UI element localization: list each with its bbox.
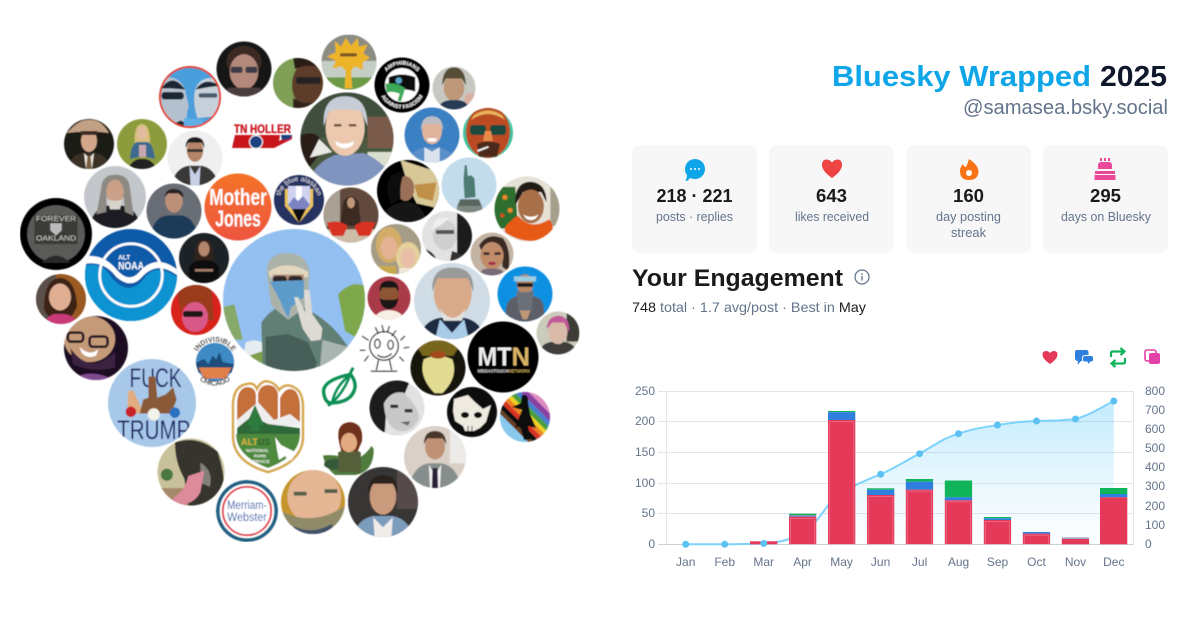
avatar: Merriam-Webster <box>216 480 278 542</box>
avatar: Alt NOAA logo <box>85 229 177 321</box>
panel: posts and replies: 218 · 221 <box>656 186 732 206</box>
right axis labels: 500 <box>1145 441 1165 455</box>
bar: May <box>828 411 855 544</box>
left axis labels: 50 <box>642 506 655 520</box>
avatar: white skull <box>447 387 497 437</box>
bar: July <box>906 479 933 544</box>
avatar: protest graphic <box>108 359 196 447</box>
avatar: MeidasTouch network: MEIDASTOUCHNETWORK <box>477 369 531 374</box>
avatar: woman with crossed arms <box>179 233 229 283</box>
avatar: Forever Oakland <box>20 198 92 270</box>
month labels <box>676 555 1124 569</box>
right axis labels: 400 <box>1145 460 1165 474</box>
month labels: Dec <box>1103 555 1124 569</box>
bar: April <box>789 514 816 544</box>
bar: September <box>984 517 1011 544</box>
panel: likes received: 643 <box>816 186 847 206</box>
right axis labels: 100 <box>1145 518 1165 532</box>
avatar: amphibians against fascism: AMPHIBIANS <box>384 60 420 72</box>
avatar: Mother Jones <box>204 174 272 240</box>
right axis labels: 700 <box>1145 403 1165 417</box>
avatar: woman with glasses <box>216 42 272 99</box>
panel: day posting streak <box>906 145 1031 253</box>
avatar: Forever Oakland: OAKLAND <box>36 233 76 242</box>
panel: posts and replies: posts · replies <box>656 210 733 224</box>
month labels: Oct <box>1027 555 1046 569</box>
avatar: blonde woman in a field <box>117 119 167 169</box>
avatar: Alt NOAA logo: ALT <box>118 254 130 261</box>
avatar: pen sketch <box>359 324 410 373</box>
avatar: smiling man with glasses <box>64 316 128 380</box>
bars <box>750 411 1127 544</box>
month labels: Aug <box>948 555 969 569</box>
chart legend <box>1042 348 1160 367</box>
bar: November <box>1062 537 1089 544</box>
icon: birthday cake <box>1094 158 1116 180</box>
icon: legend reposts <box>1111 348 1125 367</box>
avatar: dog with tongue out <box>158 438 224 506</box>
avatar: golden bearded figure <box>410 340 466 396</box>
avatar: Merriam-Webster: Webster <box>227 511 267 524</box>
avatar: Alt US National Park Service badge: ALTUS <box>241 437 270 447</box>
icon: flame <box>960 159 978 180</box>
panel: day posting streak: streak <box>951 226 987 240</box>
icon: speech bubble <box>685 159 705 181</box>
right axis labels: 600 <box>1145 422 1165 436</box>
avatar: Mother Jones: Jones <box>215 205 261 231</box>
right axis labels: 800 <box>1145 384 1165 398</box>
panel: days on Bluesky: days on Bluesky <box>1061 210 1152 224</box>
avatar: man in blue shirt <box>146 184 202 238</box>
avatar: protest graphic: TRUMP <box>117 415 190 445</box>
avatar: the onion logo <box>324 368 355 405</box>
panel: likes received: likes received <box>795 210 869 224</box>
avatar: woman close-up <box>470 232 514 276</box>
panel: likes received <box>769 145 894 253</box>
avatar: woman smiling with dark hair <box>36 274 86 324</box>
avatar: red-haired selfie <box>171 285 221 335</box>
panel: day posting streak: day posting <box>936 210 1001 224</box>
panel: days on Bluesky: 295 <box>1090 186 1121 206</box>
avatar: man in blue blazer <box>348 467 418 537</box>
month labels: Sep <box>987 555 1008 569</box>
avatar: Alt US National Park Service badge: PARK <box>254 454 267 458</box>
avatar: man on blue background <box>404 108 460 162</box>
panel: day posting streak: 160 <box>953 186 984 206</box>
avatar: painted face <box>463 106 513 158</box>
avatar: Alt US National Park Service badge: SERVICE <box>250 459 270 464</box>
icon: heart <box>822 160 842 178</box>
avatar: MeidasTouch network: MT <box>477 344 512 372</box>
avatar: bitmoji <box>323 422 374 475</box>
bar: June <box>867 488 894 544</box>
avatar: blonde woman close-up <box>281 470 345 534</box>
cumulative line <box>686 401 1114 544</box>
cumulative area <box>686 401 1114 544</box>
avatar: TN Holler logo: TN HOLLER <box>234 122 291 136</box>
avatar: Indivisible Chicago: CHICAGO <box>200 376 230 386</box>
left axis labels: 200 <box>635 414 655 428</box>
icon: legend likes <box>1042 351 1058 364</box>
title: 2025 <box>1100 61 1167 93</box>
month labels: Mar <box>753 555 774 569</box>
avatar: Alt US National Park Service badge <box>233 381 303 472</box>
avatar: woman and dog <box>377 160 439 222</box>
right axis labels <box>1145 384 1165 551</box>
avatar: sun mascot <box>322 34 376 90</box>
month labels: May <box>830 555 853 569</box>
avatar: woman in orange scarf <box>494 176 560 242</box>
avatar: man with long grey hair <box>84 166 146 228</box>
avatar: Forever Oakland: FOREVER <box>36 214 76 223</box>
left axis labels: 150 <box>635 445 655 459</box>
month labels: Jul <box>912 555 927 569</box>
bar: March <box>750 541 777 544</box>
avatar: protest graphic: FUCK <box>130 362 181 393</box>
avatar: Indivisible Chicago: INDIVISIBLE <box>193 336 237 352</box>
avatar: twin portraits <box>159 66 221 128</box>
month labels: Apr <box>793 555 812 569</box>
icon: legend replies <box>1075 350 1094 365</box>
chart: monthly engagement <box>635 384 1165 569</box>
icon: info <box>855 270 869 284</box>
month labels: Feb <box>714 555 735 569</box>
avatar: Alt US National Park Service badge: NATIONAL <box>246 448 269 453</box>
avatar: man in sunglasses on green <box>273 56 324 108</box>
avatar: man in beanie <box>432 66 476 110</box>
avatar: two blonde women <box>371 224 421 276</box>
avatar: older man in suit <box>414 263 490 339</box>
gridlines <box>658 391 1134 544</box>
avatar: statue of liberty <box>442 158 496 212</box>
avatar cloud <box>20 34 580 542</box>
handle: @samasea.bsky.social <box>963 97 1168 119</box>
right axis labels: 300 <box>1145 479 1165 493</box>
avatar: young man in hat <box>64 119 114 169</box>
bar: October <box>1023 532 1050 544</box>
right axis labels: 0 <box>1145 537 1152 551</box>
left axis labels: 250 <box>635 384 655 398</box>
avatar: Merriam-Webster: Merriam- <box>227 499 267 512</box>
avatar: man in grey suit <box>404 426 466 488</box>
title: Bluesky Wrapped <box>832 61 1091 93</box>
avatar: main profile photo <box>223 229 365 371</box>
left axis labels: 0 <box>648 537 655 551</box>
engagement summary: 748 total · 1.7 avg/post · Best in May <box>632 299 866 315</box>
month labels: Jun <box>871 555 890 569</box>
left axis labels <box>635 384 655 551</box>
right axis labels: 200 <box>1145 499 1165 513</box>
heading: your engagement: Your Engagement <box>632 265 843 292</box>
avatar: man with glasses in suit <box>168 130 222 186</box>
avatar: woman with pink hair <box>536 312 580 354</box>
avatar: tattooed man <box>498 266 552 322</box>
avatar: Indivisible Chicago <box>193 336 237 386</box>
avatar: elderly smiling man <box>300 92 394 186</box>
avatar: TN Holler logo <box>232 122 292 148</box>
bar: December <box>1100 488 1127 544</box>
panel: posts and replies <box>632 145 757 253</box>
avatar: the blue alaskan: the blue alaskan <box>276 176 322 196</box>
avatar: black and white portrait <box>422 211 472 261</box>
avatar: black and white woman <box>370 380 424 436</box>
avatar: cartoon bearded man <box>368 276 410 320</box>
avatar: amphibians against fascism <box>374 56 430 114</box>
avatar: amphibians against fascism: AGAINST FASCISM <box>380 94 424 110</box>
avatar: Alt NOAA logo: NOAA <box>118 260 144 272</box>
month labels: Nov <box>1065 555 1086 569</box>
line markers <box>682 398 1117 548</box>
bar: August <box>945 480 972 544</box>
avatar: Mother Jones: Mother <box>209 184 267 210</box>
left axis labels: 100 <box>635 476 655 490</box>
avatar: mirror selfie <box>324 188 378 242</box>
month labels: Jan <box>676 555 695 569</box>
avatar: MeidasTouch network: N <box>512 344 530 372</box>
icon: legend quotes <box>1145 350 1160 364</box>
panel: days on Bluesky <box>1043 145 1168 253</box>
avatar: rainbow silhouette <box>499 391 551 443</box>
avatar: MeidasTouch network <box>468 322 538 392</box>
avatar: the blue alaskan <box>273 174 325 226</box>
